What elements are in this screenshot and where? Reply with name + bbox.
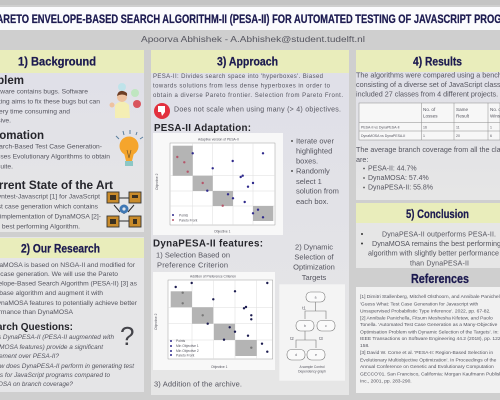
panel: references: IEEE Transactions on Software Engineering 44.2 (2018), pp. 122- [360, 336, 500, 342]
adaptation steps: highlighted [296, 146, 332, 156]
results table: 6 [490, 134, 492, 138]
adaptation steps [291, 136, 339, 206]
chart: adaptive version of PESA-II [153, 133, 283, 235]
icon: code and gears [107, 192, 141, 227]
author line: Apoorva Abhishek - A.Abhishek@student.tudelft.nl [141, 34, 365, 44]
diagram: control dependency graph: b [304, 324, 306, 328]
chart: addition of preference criterion: Addition of Preference Criterion [190, 274, 236, 278]
feature 2 label [293, 242, 335, 282]
panel: references: [3] David W. Corne et al. 'PESA-II: Region-Based Selection in [360, 350, 493, 356]
adaptation steps: solution from [296, 186, 339, 196]
average branch coverage [356, 145, 500, 192]
limitation note: Does not scale when using many (> 4) objectives. [174, 106, 341, 114]
adaptation steps: Iterate over [296, 136, 334, 146]
chart: addition of preference criterion: Points [176, 339, 186, 343]
heading: PESA-II adaptation: PESA-II Adaptation: [154, 123, 251, 134]
panel: references: Inc., 2001, pp. 283-290. [360, 378, 412, 384]
feature 2 label: Selection of [294, 252, 335, 262]
adaptation steps: each box. [296, 197, 329, 206]
diagram: control dependency graph: A sample Control [299, 365, 325, 369]
adaptation steps: boxes. [296, 156, 318, 166]
icon: person with bugs [110, 83, 141, 118]
conclusion bullets: DynaMOSA remains the best performing [372, 239, 500, 248]
results table: PESA-II vs DynaPESA-II [361, 126, 400, 130]
diagram: control dependency graph: Dependency graph [298, 370, 326, 374]
state of the art text [0, 178, 113, 230]
adaptation steps: select 1 [296, 177, 322, 186]
panel: our research [0, 237, 144, 392]
chart: adaptive version of PESA-II: Pareto Front [179, 218, 197, 222]
results table: DynaMOSA vs DynaPESA-II [361, 134, 405, 138]
feature 1 label: 1) Selection Based on [156, 250, 230, 260]
panel: background [0, 50, 144, 232]
icon: thumbs down [154, 103, 170, 119]
heading: background: 1) Background [18, 54, 96, 68]
automation text: uses Evolutionary Algorithms to obtain [0, 153, 110, 160]
research questions [0, 322, 134, 388]
conclusion bullets: algorithm with slightly better performance [368, 248, 499, 257]
PESA-II description: obtain a diverse Pareto frontier. Selection from Pareto Front. [153, 93, 343, 99]
heading: references: References [411, 272, 469, 286]
conclusion bullets [361, 231, 500, 267]
results table: 20 [456, 134, 460, 138]
feature 1 label [156, 250, 230, 270]
feature 2 label: Targets [302, 273, 327, 282]
PESA-II description: towards solutions from less dense hyperboxes in order to [153, 84, 331, 90]
title [0, 7, 500, 30]
heading: our research: 2) Our Research [21, 244, 100, 256]
feature 2 label: 2) Dynamic [295, 242, 333, 252]
results table: No. of [423, 107, 436, 112]
problem text [0, 75, 100, 124]
panel: references: 'Guess What: Test Case Generation for Javascript with [360, 302, 479, 308]
feature 1 label: Preference Criterion [157, 260, 228, 270]
diagram: control dependency graph [279, 284, 345, 381]
results table: 1 [423, 134, 425, 138]
heading: conclusion: 5) Conclusion [406, 207, 469, 221]
average branch coverage: DynaMOSA: 57.4% [368, 175, 429, 182]
PESA-II description: PESA-II: Divides search space into 'hyperboxes'. Biased [153, 74, 323, 80]
chart: addition of preference criterion: Objective 1 [211, 365, 228, 369]
research description [0, 262, 138, 316]
conclusion bullets: than DynaPESA-II [410, 260, 469, 267]
automation text [0, 130, 110, 170]
heading: results: 4) Results [413, 54, 462, 68]
results table: 1 [490, 126, 492, 130]
results table: Result [456, 114, 470, 118]
average branch coverage: DynaPESA-II: 55.8% [368, 185, 433, 192]
panel: references [356, 287, 500, 393]
diagram: control dependency graph: t2 [290, 336, 294, 341]
panel: references: Evolutionary Multiobjective Optimization'. In Proceedings of the [360, 358, 497, 364]
chart: adaptive version of PESA-II: Points [179, 214, 189, 218]
panel: references: Tonella. 'Automated Test Case Generation as a Many-Objective [360, 322, 498, 328]
icon: light bulb [116, 130, 143, 166]
results table: Same [456, 107, 468, 112]
conclusion bullets: DynaPESA-II outperforms PESA-II. [382, 231, 496, 238]
icon: question mark: ? [120, 321, 134, 351]
feature 3 label: 3) Addition of the archive. [154, 380, 242, 388]
results table: Wins [490, 114, 500, 118]
chart: addition of preference criterion: Min Objective 1 [176, 344, 199, 348]
panel: conclusion [356, 203, 500, 268]
diagram: control dependency graph: t3 [319, 336, 323, 341]
chart: adaptive version of PESA-II: Adaptive version of PESA-II [198, 138, 239, 142]
chart: addition of preference criterion: Min Objective 2 [176, 349, 199, 353]
chart: addition of preference criterion [153, 272, 275, 370]
diagram: control dependency graph: d [295, 353, 297, 357]
panel: references: Annual Conference on Genetic and Evolutionary Computation [360, 364, 494, 370]
chart: addition of preference criterion: Objective 2 [154, 313, 158, 330]
results table: Losses [423, 114, 438, 118]
panel: references: Optimisation Problem with Dynamic Selection of the Targets'. In: [360, 330, 499, 336]
adaptation steps: Randomly [296, 166, 330, 176]
panel: results [356, 50, 500, 200]
panel: references: [2] Annibale Panichella, Fitsum Meshesha Kifetew, and Paolo [360, 316, 493, 322]
panel: approach [151, 50, 349, 395]
results table: 11 [456, 126, 460, 130]
panel: references: Unsupervised Probabilistic Type Inference'. 2022, pp. 67-82. [360, 308, 491, 314]
chart: adaptive version of PESA-II: Objective 2 [155, 173, 159, 190]
chart: adaptive version of PESA-II: Objective 1 [214, 230, 231, 234]
diagram: control dependency graph: e [315, 353, 317, 357]
results description [356, 70, 500, 98]
PESA-II description [153, 74, 343, 99]
results table [359, 103, 500, 140]
average branch coverage: PESA-II: 44.7% [368, 166, 417, 173]
results table: 16 [423, 126, 427, 130]
chart: addition of preference criterion: Pareto Front [176, 354, 194, 358]
results description: included 27 classes from 4 different projects. [356, 90, 498, 98]
panel: references: 158. [360, 343, 370, 349]
heading: DynaPESA-II features: DynaPESA-II features: [153, 238, 263, 250]
average branch coverage: are: [356, 155, 368, 164]
diagram: control dependency graph: a [315, 296, 317, 300]
diagram: control dependency graph: c [325, 324, 327, 328]
feature 2 label: Optimization [293, 262, 335, 272]
heading: approach: 3) Approach [217, 54, 278, 68]
diagram: control dependency graph: t1 [302, 306, 306, 310]
